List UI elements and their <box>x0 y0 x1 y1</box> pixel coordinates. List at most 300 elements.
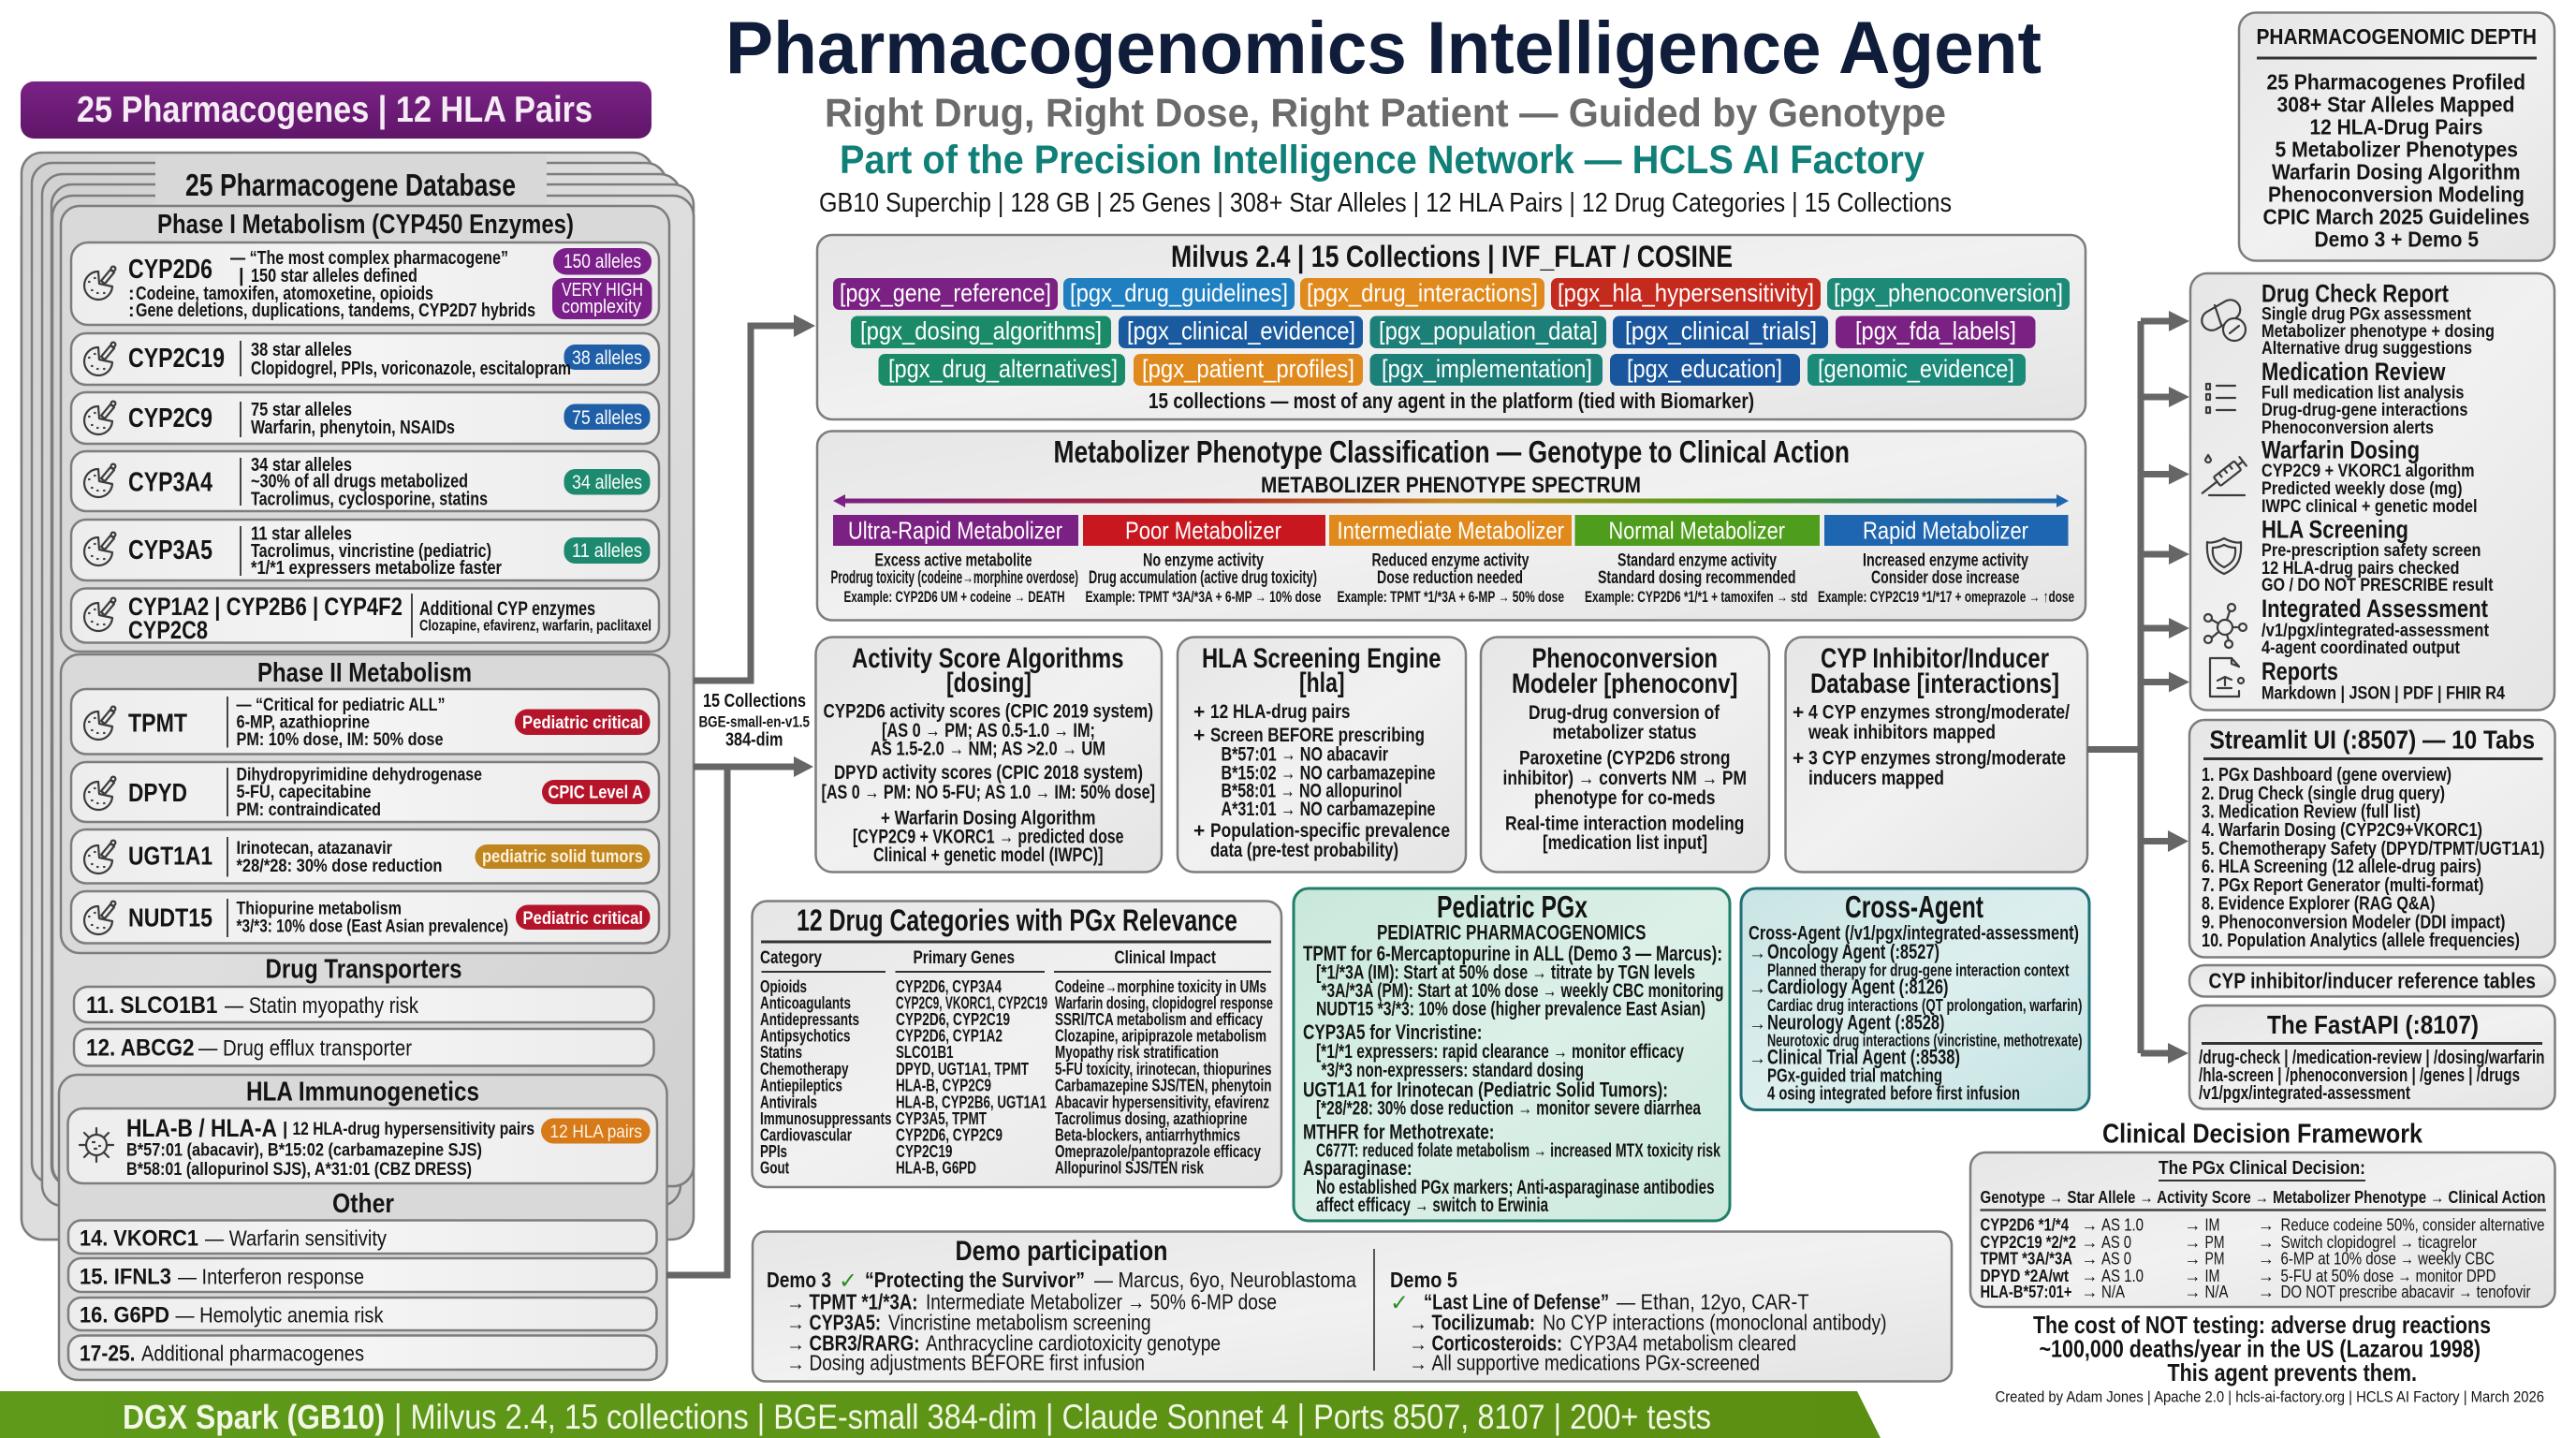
row: additional CYP enzymes <box>71 588 659 644</box>
panel: CYP inhibitor/inducer database: Database [interactions] <box>1810 668 2059 699</box>
demo 3 column: TPMT *1/*3A: <box>809 1290 917 1314</box>
table rows: Cardiovascular <box>760 1125 852 1144</box>
row: additional CYP enzymes: Clozapine, efavirenz, warfarin, paclitaxel <box>419 618 651 635</box>
panel: HLA immunogenetics and other: HLA Immunogenetics <box>246 1077 479 1107</box>
row: HLA-B / HLA-A: B*58:01 (allopurinol SJS), A*31:01 (CBZ DRESS) <box>126 1159 472 1180</box>
table rows: CYP2D6, CYP2C9 <box>896 1125 1003 1144</box>
item: drug check report: Alternative drug suggestions <box>2261 338 2472 359</box>
panel: pediatric PGx: affect efficacy → switch to Erwinia <box>1316 1195 1548 1216</box>
panel: PGx clinical decision: The PGx Clinical Decision: <box>2159 1158 2365 1179</box>
row: HLA-B / HLA-A <box>67 1108 657 1183</box>
row: HLA-B / HLA-A: HLA-B / HLA-A <box>126 1114 277 1142</box>
item: medication review <box>2261 358 2468 438</box>
row: SLCO1B1: — Statin myopathy risk <box>225 993 419 1019</box>
panel: pediatric PGx: No established PGx markers; Anti-asparaginase antibodies <box>1316 1177 1715 1198</box>
panel: Streamlit UI tabs: 8. Evidence Explorer (RAG Q&A) <box>2202 893 2436 914</box>
decision rows: HLA-B*57:01+ <box>1981 1283 2072 1301</box>
decision rows: TPMT *3A/*3A <box>1981 1249 2072 1268</box>
phenotype: intermediate: Example: TPMT *1/*3A + 6-MP → 50% dose <box>1337 588 1564 606</box>
panel: activity score algorithms: DPYD activity scores (CPIC 2018 system) <box>834 762 1143 784</box>
panel: CYP inhibitor/inducer database: 4 CYP enzymes strong/moderate/ <box>1808 702 2070 723</box>
panel: pediatric PGx: [*1/*3A (IM): Start at 50% dose → titrate by TGN levels <box>1316 962 1695 983</box>
panel: pediatric PGx <box>1294 888 1730 1221</box>
panel: HLA screening engine: B*58:01 → NO allopurinol <box>1221 781 1402 801</box>
row: ABCG2: 12. ABCG2 <box>86 1035 195 1062</box>
panel: demo participation <box>753 1232 1952 1382</box>
item: reports <box>2261 657 2505 704</box>
row: TPMT: 6-MP, azathioprine <box>236 712 370 732</box>
row: UGT1A1: pediatric solid tumors <box>482 847 643 867</box>
panel: cross-agent: PGx-guided trial matching <box>1767 1065 1942 1086</box>
row: DPYD: DPYD <box>128 778 187 807</box>
decision rows: AS 1.0 <box>2101 1215 2144 1234</box>
callout: cost of not testing: ~100,000 deaths/year in the US (Lazarou 1998) <box>2039 1335 2481 1363</box>
decision rows: CYP2D6 *1/*4 <box>1981 1215 2069 1234</box>
row: CYP2C9: CYP2C9 <box>128 404 212 433</box>
decision rows: CYP2C19 *2/*2 <box>1981 1233 2076 1252</box>
panel: pediatric PGx: UGT1A1 for Irinotecan (Pediatric Solid Tumors): <box>1303 1078 1668 1101</box>
table rows: Carbamazepine SJS/TEN, phenytoin <box>1055 1075 1271 1095</box>
decision rows: 5-FU at 50% dose → monitor DPD <box>2280 1267 2496 1285</box>
icon: pills <box>2198 296 2246 341</box>
heading: 25 Pharmacogene Database: 25 Pharmacogene Database <box>185 168 516 202</box>
row: CYP2C19: 38 star alleles <box>251 340 352 360</box>
panel: metabolizer phenotype classification: METABOLIZER PHENOTYPE SPECTRUM <box>1261 473 1641 498</box>
table rows: CYP2D6, CYP3A4 <box>896 976 1003 996</box>
decision rows: → <box>2082 1283 2099 1301</box>
row: CYP2C9 <box>71 392 659 444</box>
table rows: Chemotherapy <box>760 1059 849 1078</box>
panel: output capabilities <box>2190 273 2554 710</box>
item: warfarin dosing: Warfarin Dosing <box>2261 436 2420 464</box>
decision rows: → <box>2258 1267 2275 1285</box>
panel: demo participation: Demo participation <box>955 1236 1168 1267</box>
decision rows: AS 0 <box>2101 1233 2131 1252</box>
table rows: Antidepressants <box>760 1009 859 1029</box>
table rows: Statins <box>760 1042 802 1062</box>
item: warfarin dosing <box>2261 436 2477 517</box>
panel: pharmacogenomic depth: 25 Pharmacogenes Profiled <box>2267 69 2525 94</box>
decision rows: N/A <box>2205 1283 2228 1301</box>
panel: Phase II metabolism <box>61 654 669 953</box>
panel: pediatric PGx: [*28/*28: 30% dose reduction → monitor severe diarrhea <box>1316 1097 1701 1120</box>
row: CYP2C19 <box>71 333 659 385</box>
item: medication review: Drug-drug-gene interactions <box>2261 400 2468 420</box>
collection chips: [pgx_dosing_algorithms] <box>860 316 1102 345</box>
demo 3 column: → <box>786 1314 805 1335</box>
table rows: CYP2D6, CYP2C19 <box>896 1009 1010 1029</box>
panel: cross-agent: Cardiology Agent (:8126) <box>1767 976 1949 998</box>
phenotype: rapid: Rapid Metabolizer <box>1863 517 2028 545</box>
panel: HLA screening engine: Population-specific prevalence <box>1210 820 1450 842</box>
decision rows: → <box>2082 1267 2099 1285</box>
row: TPMT: TPMT <box>128 708 187 738</box>
row: HLA-B / HLA-A: B*57:01 (abacavir), B*15:02 (carbamazepine SJS) <box>126 1140 482 1161</box>
demo 5 column: Corticosteroids: <box>1432 1331 1562 1356</box>
panel: Phase II metabolism: Phase II Metabolism <box>257 658 472 688</box>
decision rows: PM <box>2205 1249 2224 1268</box>
panel: 12 drug categories table: 12 Drug Categories with PGx Relevance <box>797 903 1237 937</box>
row: TPMT <box>71 689 659 755</box>
demo 3 column: → <box>786 1294 805 1314</box>
decision rows: → <box>2082 1233 2099 1252</box>
panel: pediatric PGx: NUDT15 *3/*3: 10% dose (higher prevalence East Asian) <box>1316 998 1705 1020</box>
item: HLA screening: 12 HLA-drug pairs checked <box>2261 558 2460 579</box>
row: DPYD: Dihydropyrimidine dehydrogenase <box>236 764 482 785</box>
row: IFNL3 <box>68 1258 657 1292</box>
decision rows: AS 0 <box>2101 1249 2131 1268</box>
callout: cost of not testing: This agent prevents them. <box>2168 1358 2417 1387</box>
row: CYP2C9: Warfarin, phenytoin, NSAIDs <box>251 418 455 438</box>
row: CYP2C9: 75 star alleles <box>251 400 352 420</box>
panel: HLA screening engine: Screen BEFORE prescribing <box>1210 725 1425 746</box>
row: UGT1A1: Irinotecan, atazanavir <box>236 838 392 858</box>
phenotype: normal <box>1574 515 1820 606</box>
item: HLA screening: GO / DO NOT PRESCRIBE result <box>2261 575 2494 595</box>
panel: pharmacogenomic depth: Phenoconversion Modeling <box>2268 182 2525 206</box>
panel: FastAPI endpoints <box>2189 1005 2555 1108</box>
row: CYP2D6: : <box>128 284 135 304</box>
panel: Milvus collections <box>817 235 2086 419</box>
row: UGT1A1: *28/*28: 30% dose reduction <box>236 856 442 876</box>
item: HLA screening <box>2261 515 2494 595</box>
demo 5 column: No CYP interactions (monoclonal antibody) <box>1543 1311 1887 1335</box>
decision rows: AS 1.0 <box>2101 1267 2144 1285</box>
panel: HLA screening engine: [hla] <box>1299 668 1344 698</box>
decision rows: → <box>2185 1267 2202 1285</box>
row: HLA-B / HLA-A: 12 HLA-drug hypersensitivity pairs <box>292 1119 534 1139</box>
panel: CYP inhibitor/inducer database: inducers mapped <box>1808 768 1944 789</box>
panel: cross-agent: Cross-Agent (/v1/pgx/integrated-assessment) <box>1749 923 2079 944</box>
panel: pediatric PGx: TPMT for 6-Mercaptopurine in ALL (Demo 3 — Marcus): <box>1303 942 1722 965</box>
table rows: CYP2C9, VKORC1, CYP2C19 <box>896 992 1047 1013</box>
panel: activity score algorithms: Activity Score Algorithms <box>852 643 1123 674</box>
table rows: Clozapine, aripiprazole metabolism <box>1055 1026 1266 1045</box>
heading: clinical decision framework: Clinical Decision Framework <box>2102 1120 2423 1150</box>
row: HLA-B / HLA-A: 12 HLA pairs <box>550 1123 642 1142</box>
panel: 12 drug categories table: Category <box>760 948 822 968</box>
panel: HLA screening engine: + <box>1193 725 1205 746</box>
table rows: DPYD, UGT1A1, TPMT <box>896 1059 1029 1078</box>
panel: Streamlit UI tabs: 7. PGx Report Generator (multi-format) <box>2202 875 2484 896</box>
collection chips: [pgx_clinical_evidence] <box>1127 316 1355 345</box>
panel: CYP inhibitor/inducer database: 3 CYP enzymes strong/moderate <box>1808 747 2066 770</box>
panel: HLA screening engine: B*15:02 → NO carbamazepine <box>1221 762 1436 785</box>
pill: very high complexity <box>552 278 651 319</box>
panel: phenoconversion modeler: inhibitor) → converts NM → PM <box>1503 768 1747 789</box>
collection chips: [pgx_education] <box>1627 355 1782 383</box>
table rows: 5-FU toxicity, irinotecan, thiopurines <box>1055 1059 1271 1078</box>
row: CYP3A4 <box>71 451 659 511</box>
table rows: Warfarin dosing, clopidogrel response <box>1055 992 1273 1013</box>
table rows: Omeprazole/pantoprazole efficacy <box>1055 1141 1262 1161</box>
row: CYP2D6 <box>71 242 659 325</box>
row: CYP3A5: 11 alleles <box>572 540 642 562</box>
table rows: Antivirals <box>760 1092 817 1112</box>
demo 3 column: Dosing adjustments BEFORE first infusion <box>809 1350 1145 1374</box>
decision rows: → <box>2258 1249 2275 1268</box>
collection chips: [pgx_phenoconversion] <box>1834 279 2063 307</box>
panel: Streamlit UI tabs: 6. HLA Screening (12 allele-drug pairs) <box>2202 857 2481 877</box>
panel: cross-agent: 4 osing integrated before first infusion <box>1767 1084 2020 1105</box>
panel: Streamlit UI tabs: 2. Drug Check (single drug query) <box>2202 784 2445 804</box>
phenotype: intermediate: Dose reduction needed <box>1377 568 1523 588</box>
panel: phenoconversion modeler: [medication list input] <box>1543 832 1707 854</box>
panel: CYP inhibitor/inducer database <box>1786 637 2087 873</box>
panel: Streamlit UI tabs: 1. PGx Dashboard (gene overview) <box>2202 765 2452 785</box>
panel: pharmacogenomic depth: 5 Metabolizer Phenotypes <box>2275 137 2518 161</box>
table rows: Opioids <box>760 976 807 996</box>
row: NUDT15: *3/*3: 10% dose (East Asian prevalence) <box>236 916 508 936</box>
collection chips: [pgx_population_data] <box>1379 316 1598 345</box>
panel: pharmacogenomic depth: PHARMACOGENOMIC DEPTH <box>2256 24 2537 49</box>
row: UGT1A1: UGT1A1 <box>128 841 212 871</box>
icon: report <box>2210 658 2244 697</box>
row: ABCG2: — Drug efflux transporter <box>198 1035 412 1062</box>
collection chips: [pgx_patient_profiles] <box>1142 355 1354 383</box>
decision rows: Switch clopidogrel → ticagrelor <box>2280 1233 2477 1252</box>
subtitle: Right Drug, Right Dose, Right Patient — Guided by Genotype <box>825 91 1946 136</box>
panel: activity score algorithms: [dosing] <box>946 668 1032 698</box>
panel: cross-agent: → <box>1749 944 1766 963</box>
icon: immune virus <box>80 1128 113 1162</box>
panel: phenoconversion modeler: Paroxetine (CYP2D6 strong <box>1519 747 1730 770</box>
decision rows: IM <box>2205 1215 2220 1234</box>
table rows: CYP2D6, CYP1A2 <box>896 1026 1003 1045</box>
panel: HLA screening engine: HLA Screening Engine <box>1202 643 1442 674</box>
table rows: Tacrolimus dosing, azathioprine <box>1055 1108 1247 1128</box>
row: VKORC1 <box>68 1221 657 1254</box>
left banner: 25 Pharmacogenes | 12 HLA Pairs: 25 Pharmacogenes | 12 HLA Pairs <box>77 90 593 130</box>
icon: syringe <box>2199 455 2247 497</box>
item: reports: Reports <box>2261 657 2338 685</box>
panel: pediatric PGx: *3A/*3A (PM): Start at 10% dose → weekly CBC monitoring <box>1322 980 1724 1002</box>
decision rows: → <box>2082 1249 2099 1268</box>
row: CYP2C19: Clopidogrel, PPIs, voriconazole, escitalopram <box>251 359 571 379</box>
panel: 12 drug categories table: Primary Genes <box>914 948 1015 968</box>
panel: HLA screening engine: A*31:01 → NO carbamazepine <box>1221 799 1436 820</box>
panel: phenoconversion modeler: Modeler [phenoconv] <box>1512 668 1737 699</box>
panel: activity score algorithms: [AS 0 → PM: NO 5-FU; AS 1.0 → IM: 50% dose] <box>822 782 1155 803</box>
item: drug check report <box>2261 279 2495 359</box>
table rows: Gout <box>760 1157 789 1178</box>
phenotype: intermediate: Intermediate Metabolizer <box>1337 517 1564 545</box>
decision rows: IM <box>2205 1267 2220 1285</box>
demo 5 column: All supportive medications PGx-screened <box>1432 1350 1760 1374</box>
table rows: Abacavir hypersensitivity, efavirenz <box>1055 1092 1269 1112</box>
row: CYP3A4: CYP3A4 <box>128 468 212 498</box>
panel: pharmacogenomic depth: CPIC March 2025 Guidelines <box>2263 204 2529 228</box>
table rows: SLCO1B1 <box>896 1042 953 1062</box>
spec line: GB10 Superchip | 128 GB | 25 Genes | 308+ Star Alleles | 12 HLA Pairs | 12 Drug Categories | 15 Collections <box>819 188 1952 218</box>
label: embedding info: BGE-small-en-v1.5 <box>698 713 810 730</box>
row: DPYD <box>71 762 659 822</box>
item: medication review: Full medication list analysis <box>2261 382 2465 403</box>
panel: activity score algorithms <box>816 637 1162 873</box>
left banner: 25 Pharmacogenes | 12 HLA Pairs <box>21 81 651 139</box>
panel: PGx clinical decision <box>1970 1152 2555 1307</box>
row: G6PD <box>68 1298 657 1330</box>
panel: cross-agent: Cross-Agent <box>1845 889 1983 924</box>
panel: pediatric PGx: C677T: reduced folate metabolism → increased MTX toxicity risk <box>1316 1140 1721 1161</box>
decision rows: → <box>2258 1215 2275 1234</box>
panel: cross-agent: Cardiac drug interactions (QT prolongation, warfarin) <box>1767 995 2082 1015</box>
icon: checklist <box>2206 384 2235 413</box>
item: integrated assessment: Integrated Assessment <box>2261 594 2488 623</box>
decision rows: → <box>2185 1215 2202 1234</box>
panel: phenoconversion modeler: Real-time interaction modeling <box>1505 813 1745 835</box>
row: DPYD: PM: contraindicated <box>236 800 381 820</box>
item: warfarin dosing: Predicted weekly dose (mg) <box>2261 478 2462 499</box>
demo 3 column: CBR3/RARG: <box>809 1331 919 1356</box>
panel: HLA screening engine: + <box>1193 820 1205 842</box>
row: CYP2D6: : <box>128 301 135 321</box>
row: VKORC1: 14. VKORC1 <box>80 1226 198 1251</box>
row: SLCO1B1 <box>74 987 653 1022</box>
panel: Phase I metabolism: Phase I Metabolism (CYP450 Enzymes) <box>157 210 574 240</box>
panel: phenoconversion modeler: metabolizer status <box>1552 722 1696 743</box>
panel: CYP inhibitor/inducer database: + <box>1793 747 1804 770</box>
bottom status bar: DGX Spark (GB10) <box>123 1398 385 1436</box>
panel: pediatric PGx: Pediatric PGx <box>1437 889 1588 924</box>
bottom status bar <box>0 1391 1881 1438</box>
collection chips <box>833 278 2070 386</box>
phenotype: ultra-rapid: Prodrug toxicity (codeine→morphine overdose) <box>831 568 1078 588</box>
phenotype: rapid <box>1818 515 2074 606</box>
row: CYP3A4: Tacrolimus, cyclosporine, statins <box>251 489 488 509</box>
phenotype: normal: Standard enzyme activity <box>1617 550 1777 571</box>
decision rows: DO NOT prescribe abacavir → tenofovir <box>2280 1283 2531 1301</box>
row: additional CYP enzymes: CYP2C8 <box>128 616 208 644</box>
panel: Streamlit UI tabs: 4. Warfarin Dosing (CYP2C9+VKORC1) <box>2202 820 2482 841</box>
collection chips: [genomic_evidence] <box>1818 355 2014 383</box>
row: CYP3A5 <box>71 520 659 580</box>
panel: Milvus collections: 15 collections — most of any agent in the platform (tied with Biomarker) <box>1149 389 1754 413</box>
row: NUDT15: Pediatric critical <box>522 909 643 929</box>
row: G6PD: — Hemolytic anemia risk <box>176 1303 384 1328</box>
panel: CYP inhibitor/inducer database: + <box>1793 702 1804 723</box>
icon: shield <box>2207 538 2241 574</box>
phenotype: rapid: Example: CYP2C19 *1/*17 + omeprazole → ↑dose <box>1818 588 2074 606</box>
item: medication review: Medication Review <box>2261 358 2446 386</box>
phenotype: poor: Example: TPMT *3A/*3A + 6-MP → 10% dose <box>1086 588 1322 606</box>
demo 5 column: → <box>1409 1354 1427 1374</box>
decision rows: → <box>2258 1233 2275 1252</box>
phenotype: poor: Drug accumulation (active drug toxicity) <box>1089 568 1317 588</box>
row: CYP2C19: CYP2C19 <box>128 344 225 374</box>
row: additional CYP enzymes: CYP1A2 | CYP2B6 | CYP4F2 <box>128 593 402 621</box>
label: embedding info <box>698 691 810 751</box>
panel: CYP inhibitor/inducer database: CYP Inhibitor/Inducer <box>1821 643 2049 674</box>
item: HLA screening: Pre-prescription safety screen <box>2261 540 2481 561</box>
panel: cross-agent: Planned therapy for drug-gene interaction context <box>1767 961 2069 979</box>
row: CYP3A5: 11 star alleles <box>251 524 352 545</box>
decision rows: DPYD *2A/wt <box>1981 1267 2069 1285</box>
collection chips: [pgx_drug_interactions] <box>1307 279 1538 307</box>
row: CYP3A5: CYP3A5 <box>128 536 212 565</box>
table rows: Myopathy risk stratification <box>1055 1042 1219 1062</box>
table rows <box>760 976 1273 1178</box>
row: SLCO1B1: 11. SLCO1B1 <box>86 992 218 1019</box>
panel: phenoconversion modeler <box>1481 637 1769 873</box>
row: CYP2D6: CYP2D6 <box>128 255 212 285</box>
item: integrated assessment <box>2261 594 2489 658</box>
table rows: Beta-blockers, antiarrhythmics <box>1055 1125 1240 1144</box>
demo 3 column: Demo 3 <box>767 1268 831 1292</box>
collection chips: [pgx_fda_labels] <box>1855 316 2016 345</box>
table rows: HLA-B, CYP2C9 <box>896 1075 991 1095</box>
row: CYP3A4: 34 star alleles <box>251 455 352 476</box>
panel: metabolizer phenotype classification <box>817 431 2086 620</box>
demo 3 column <box>767 1268 1356 1374</box>
row: TPMT: Pediatric critical <box>522 713 643 733</box>
phenotype: ultra-rapid: Ultra-Rapid Metabolizer <box>848 517 1062 545</box>
demo 5 column: → <box>1409 1314 1427 1335</box>
row: IFNL3: — Interferon response <box>178 1264 364 1288</box>
phenotype: poor: No enzyme activity <box>1143 550 1264 571</box>
table rows: Codeine→morphine toxicity in UMs <box>1055 976 1266 996</box>
pill: 150 alleles: 150 alleles <box>564 251 641 272</box>
decision rows: 6-MP at 10% dose → weekly CBC <box>2280 1249 2495 1268</box>
demo 3 column: → <box>786 1335 805 1356</box>
decision rows: → <box>2185 1249 2202 1268</box>
arrows: outputs trunk <box>2087 311 2189 1064</box>
row: CYP2C9: 75 alleles <box>572 407 642 429</box>
panel: pediatric PGx: Asparaginase: <box>1303 1156 1412 1180</box>
table rows: Allopurinol SJS/TEN risk <box>1055 1157 1205 1178</box>
panel: phenoconversion modeler: Phenoconversion <box>1531 643 1718 674</box>
row: IFNL3: 15. IFNL3 <box>80 1264 171 1290</box>
title: Pharmacogenomics Intelligence Agent <box>725 6 2042 89</box>
panel: Streamlit UI tabs: 3. Medication Review (full list) <box>2202 801 2421 822</box>
table rows: PPIs <box>760 1141 787 1161</box>
pill: very high complexity: VERY HIGH <box>562 280 643 301</box>
row: HLA-B / HLA-A: | <box>283 1120 287 1139</box>
table rows: Anticoagulants <box>760 992 851 1013</box>
panel: HLA screening engine: data (pre-test probability) <box>1210 840 1398 861</box>
panel: cross-agent: Clinical Trial Agent (:8538) <box>1767 1045 1960 1069</box>
decision rows: N/A <box>2101 1283 2125 1301</box>
table rows: HLA-B, CYP2B6, UGT1A1 <box>896 1092 1046 1112</box>
item: integrated assessment: 4-agent coordinated output <box>2261 638 2460 658</box>
panel: cross-agent <box>1741 888 2089 1110</box>
row: CYP2D6: | <box>239 266 244 286</box>
panel: FastAPI endpoints: /v1/pgx/integrated-assessment <box>2199 1083 2410 1104</box>
table rows: Antipsychotics <box>760 1026 850 1045</box>
panel: pediatric PGx: MTHFR for Methotrexate: <box>1303 1120 1494 1144</box>
decision rows: PM <box>2205 1233 2224 1252</box>
panel: pediatric PGx: CYP3A5 for Vincristine: <box>1303 1020 1483 1044</box>
demo 3 column: → <box>786 1354 805 1374</box>
collection chips: [pgx_implementation] <box>1382 355 1592 383</box>
panel: CYP inhibitor/inducer database: weak inhibitors mapped <box>1808 722 1996 743</box>
phenotype: ultra-rapid: Example: CYP2D6 UM + codeine → DEATH <box>844 588 1065 606</box>
row: CYP2D6: Gene deletions, duplications, tandems, CYP2D7 hybrids <box>136 301 535 321</box>
collection chips: [pgx_drug_guidelines] <box>1070 279 1288 307</box>
row: CYP3A4: 34 alleles <box>572 472 642 493</box>
item: integrated assessment: /v1/pgx/integrated-assessment <box>2261 620 2489 640</box>
phenotype: normal: Example: CYP2D6 *1/*1 + tamoxifen → std <box>1585 588 1808 606</box>
panel: metabolizer phenotype classification: Metabolizer Phenotype Classification — Genotype to Clinical Action <box>1054 434 1850 469</box>
row: NUDT15: Thiopurine metabolism <box>236 899 402 919</box>
panel: HLA screening engine: 12 HLA-drug pairs <box>1210 701 1350 723</box>
row: CYP2C19: 38 alleles <box>572 347 642 369</box>
panel: pediatric PGx: [*1/*1 expressers: rapid clearance → monitor efficacy <box>1316 1041 1684 1063</box>
decision rows: → <box>2185 1233 2202 1252</box>
item: drug check report: Single drug PGx assessment <box>2261 303 2471 324</box>
panel: activity score algorithms: [CYP2C9 + VKORC1 → predicted dose <box>853 826 1123 848</box>
panel: phenoconversion modeler: phenotype for co-meds <box>1534 787 1715 809</box>
